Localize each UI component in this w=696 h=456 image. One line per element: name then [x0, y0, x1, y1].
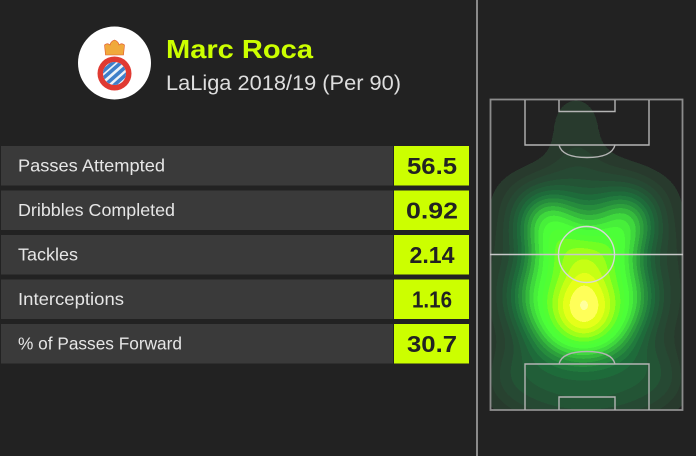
pitch outline [490, 100, 682, 410]
row: Dribbles Completed: Dribbles Completed [18, 200, 175, 220]
top penalty box [525, 100, 649, 145]
icon: crest ring [98, 56, 132, 90]
stats table [1, 146, 469, 364]
bottom penalty arc [559, 352, 615, 364]
club badge: Espanyol crest [78, 26, 151, 100]
top penalty arc [559, 145, 615, 158]
row: Dribbles Completed: 0.92 [406, 198, 458, 224]
halfway line [490, 254, 683, 256]
row: Tackles [1, 235, 469, 274]
row: Dribbles Completed [1, 190, 469, 230]
row: % of Passes Forward: 30.7 [407, 331, 457, 357]
title: player name: Marc Roca [166, 34, 314, 64]
row: Interceptions [1, 280, 469, 319]
football pitch markings [490, 100, 683, 410]
bottom penalty box [525, 364, 649, 410]
row: Passes Attempted: Passes Attempted [18, 156, 165, 176]
row: Tackles: 2.14 [410, 242, 455, 268]
row: Interceptions: Interceptions [18, 289, 124, 309]
icon: crest stripes [103, 62, 126, 85]
row: Passes Attempted [1, 146, 469, 186]
centre circle [558, 226, 614, 282]
bottom six-yard box [559, 397, 615, 410]
subtitle: competition: LaLiga 2018/19 (Per 90) [166, 71, 401, 95]
vertical divider [476, 0, 478, 456]
row: % of Passes Forward [1, 324, 469, 364]
row: Tackles: Tackles [18, 244, 78, 264]
top six-yard box [559, 100, 615, 112]
heatmap [492, 100, 682, 410]
row: Passes Attempted: 56.5 [407, 153, 457, 179]
row: Interceptions: 1.16 [412, 286, 452, 312]
icon: crown [104, 40, 124, 55]
row: % of Passes Forward: % of Passes Forward [18, 334, 182, 354]
